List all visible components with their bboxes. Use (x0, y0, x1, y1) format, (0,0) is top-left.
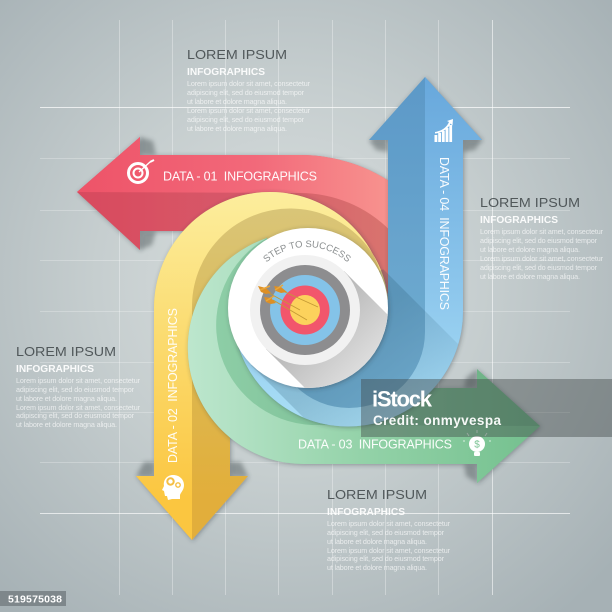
icon: growth chart (434, 119, 453, 142)
text block: bottom: Lorem ipsum dolor sit amet, consectetur (327, 546, 451, 555)
target medallion (226, 226, 391, 392)
arrow: yellow data 02: DATA - 02 INFOGRAPHICS (166, 308, 180, 463)
long shadow over blue ring (251, 270, 458, 426)
text block: bottom: INFOGRAPHICS (327, 506, 405, 518)
watermark banner (361, 379, 612, 437)
arrow: green data 03: DATA - 03 INFOGRAPHICS (298, 438, 452, 452)
text block: left (16, 345, 141, 429)
arrow: red data 01: DATA - 01 INFOGRAPHICS (163, 170, 317, 184)
text block: top: Lorem ipsum dolor sit amet, consectetur (187, 106, 311, 115)
text block: right: adipiscing elit, sed do eiusmod tempor (480, 236, 598, 245)
arrow: blue data 04: DATA - 04 INFOGRAPHICS (437, 157, 451, 310)
text block: right: Lorem ipsum dolor sit amet, consectetur (480, 227, 604, 236)
target rings (250, 255, 360, 365)
text block: top (187, 48, 311, 133)
text block: right: Lorem ipsum dolor sit amet, consectetur (480, 254, 604, 263)
text block: bottom (327, 488, 451, 572)
text block: left: Lorem ipsum dolor sit amet, consectetur (16, 403, 141, 412)
icon: target (128, 160, 154, 182)
text block: right (480, 196, 604, 281)
text block: left: LOREM IPSUM (16, 345, 116, 359)
target arrows (258, 285, 318, 320)
text block: left: Lorem ipsum dolor sit amet, consectetur (16, 376, 141, 385)
arrow: red data 01 (77, 137, 458, 320)
text block: bottom: ut labore et dolore magna aliqua. (327, 537, 427, 546)
text block: top: adipiscing elit, sed do eiusmod tempor (187, 115, 305, 124)
icon: dollar light bulb: $ (474, 440, 480, 450)
text block: top: adipiscing elit, sed do eiusmod tempor (187, 88, 305, 97)
text block: left: INFOGRAPHICS (16, 363, 94, 375)
text block: right: LOREM IPSUM (480, 196, 580, 210)
text block: bottom: Lorem ipsum dolor sit amet, consectetur (327, 519, 451, 528)
text block: top: ut labore et dolore magna aliqua. (187, 124, 287, 133)
text block: left: ut labore et dolore magna aliqua. (16, 394, 117, 403)
text block: left: ut labore et dolore magna aliqua. (16, 420, 117, 429)
arrow: blue data 04 (238, 77, 482, 426)
text block: top: LOREM IPSUM (187, 48, 287, 62)
text block: bottom: adipiscing elit, sed do eiusmod tempor (327, 528, 445, 537)
text block: top: INFOGRAPHICS (187, 66, 265, 78)
text block: left: adipiscing elit, sed do eiusmod tempor (16, 411, 135, 420)
text block: bottom: adipiscing elit, sed do eiusmod tempor (327, 554, 445, 563)
image id label (0, 591, 66, 606)
curved heading: STEP TO SUCCESS (264, 240, 351, 262)
text block: bottom: ut labore et dolore magna aliqua. (327, 563, 427, 572)
image id label: 519575038 (8, 594, 62, 606)
text block: top: ut labore et dolore magna aliqua. (187, 97, 287, 106)
text block: bottom: LOREM IPSUM (327, 488, 427, 502)
watermark banner: iStock (372, 386, 433, 412)
arrow: yellow data 02 (136, 192, 388, 540)
watermark banner: Credit: onmyvespa (373, 413, 501, 428)
text block: top: Lorem ipsum dolor sit amet, consectetur (187, 79, 311, 88)
text block: right: INFOGRAPHICS (480, 214, 558, 226)
text block: right: ut labore et dolore magna aliqua. (480, 272, 580, 281)
long shadow (266, 271, 388, 388)
text block: right: ut labore et dolore magna aliqua. (480, 245, 580, 254)
icon: dollar light bulb (463, 430, 491, 456)
text block: right: adipiscing elit, sed do eiusmod tempor (480, 263, 598, 272)
icon: head with gears (162, 475, 184, 500)
arrow: green data 03 (188, 238, 540, 483)
text block: left: adipiscing elit, sed do eiusmod tempor (16, 385, 135, 394)
